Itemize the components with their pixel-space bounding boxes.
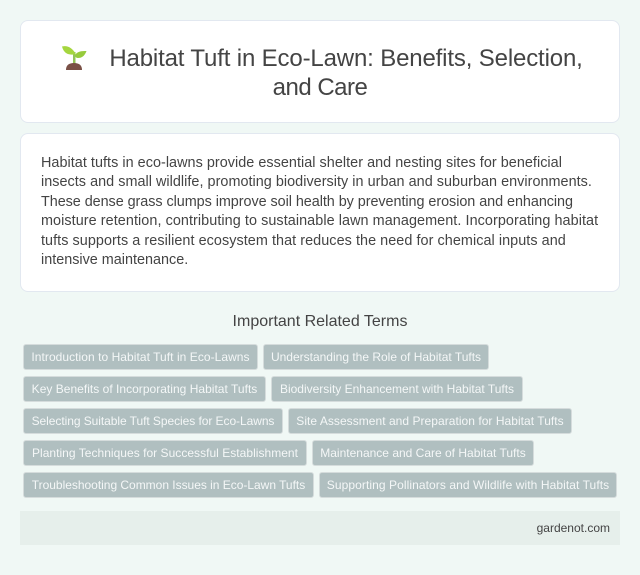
- panel: title card: [20, 20, 620, 123]
- tag 9: [23, 472, 314, 498]
- description line 2: insects and small wildlife, promoting biodiversity in urban and suburban environments.: [41, 174, 592, 190]
- tag 4: [271, 376, 523, 402]
- tag 2: [263, 344, 489, 370]
- tag 7: [23, 440, 307, 466]
- panel: description card: [20, 133, 620, 292]
- tag 5: [23, 408, 283, 434]
- description line 3: These dense grass clumps improve soil health by preventing erosion and enhancing: [41, 194, 573, 210]
- tag 6: [288, 408, 572, 434]
- title line 2: and Care: [273, 74, 367, 101]
- tag 7: Planting Techniques for Successful Establishment: [32, 446, 298, 460]
- tag 6: Site Assessment and Preparation for Habitat Tufts: [296, 414, 564, 428]
- tag 10: [319, 472, 617, 498]
- tag 5: Selecting Suitable Tuft Species for Eco-Lawns: [32, 414, 274, 428]
- tag 4: Biodiversity Enhancement with Habitat Tufts: [280, 382, 514, 396]
- description line 6: intensive maintenance.: [41, 252, 188, 268]
- footer text: gardenot.com: [537, 521, 610, 535]
- tag 1: [23, 344, 258, 370]
- tag 10: Supporting Pollinators and Wildlife with Habitat Tufts: [327, 478, 609, 492]
- tag 1: Introduction to Habitat Tuft in Eco-Lawns: [31, 350, 250, 364]
- tag 9: Troubleshooting Common Issues in Eco-Lawn Tufts: [32, 478, 305, 492]
- tag 2: Understanding the Role of Habitat Tufts: [271, 350, 481, 364]
- description line 1: Habitat tufts in eco-lawns provide essential shelter and nesting sites for beneficial: [41, 155, 562, 171]
- tag 8: Maintenance and Care of Habitat Tufts: [320, 446, 526, 460]
- tag 3: Key Benefits of Incorporating Habitat Tufts: [32, 382, 257, 396]
- tag 8: [312, 440, 534, 466]
- description line 4: moisture retention, contributing to sustainable lawn management. Incorporating habitat: [41, 213, 598, 229]
- tag 3: [23, 376, 266, 402]
- description line 5: tufts supports a resilient ecosystem that reduces the need for chemical inputs and: [41, 233, 566, 249]
- heading: related terms: Important Related Terms: [233, 313, 407, 330]
- icon: seedling: [62, 46, 86, 70]
- title line 1: Habitat Tuft in Eco-Lawn: Benefits, Selection,: [109, 45, 583, 72]
- footer bar: [20, 511, 620, 545]
